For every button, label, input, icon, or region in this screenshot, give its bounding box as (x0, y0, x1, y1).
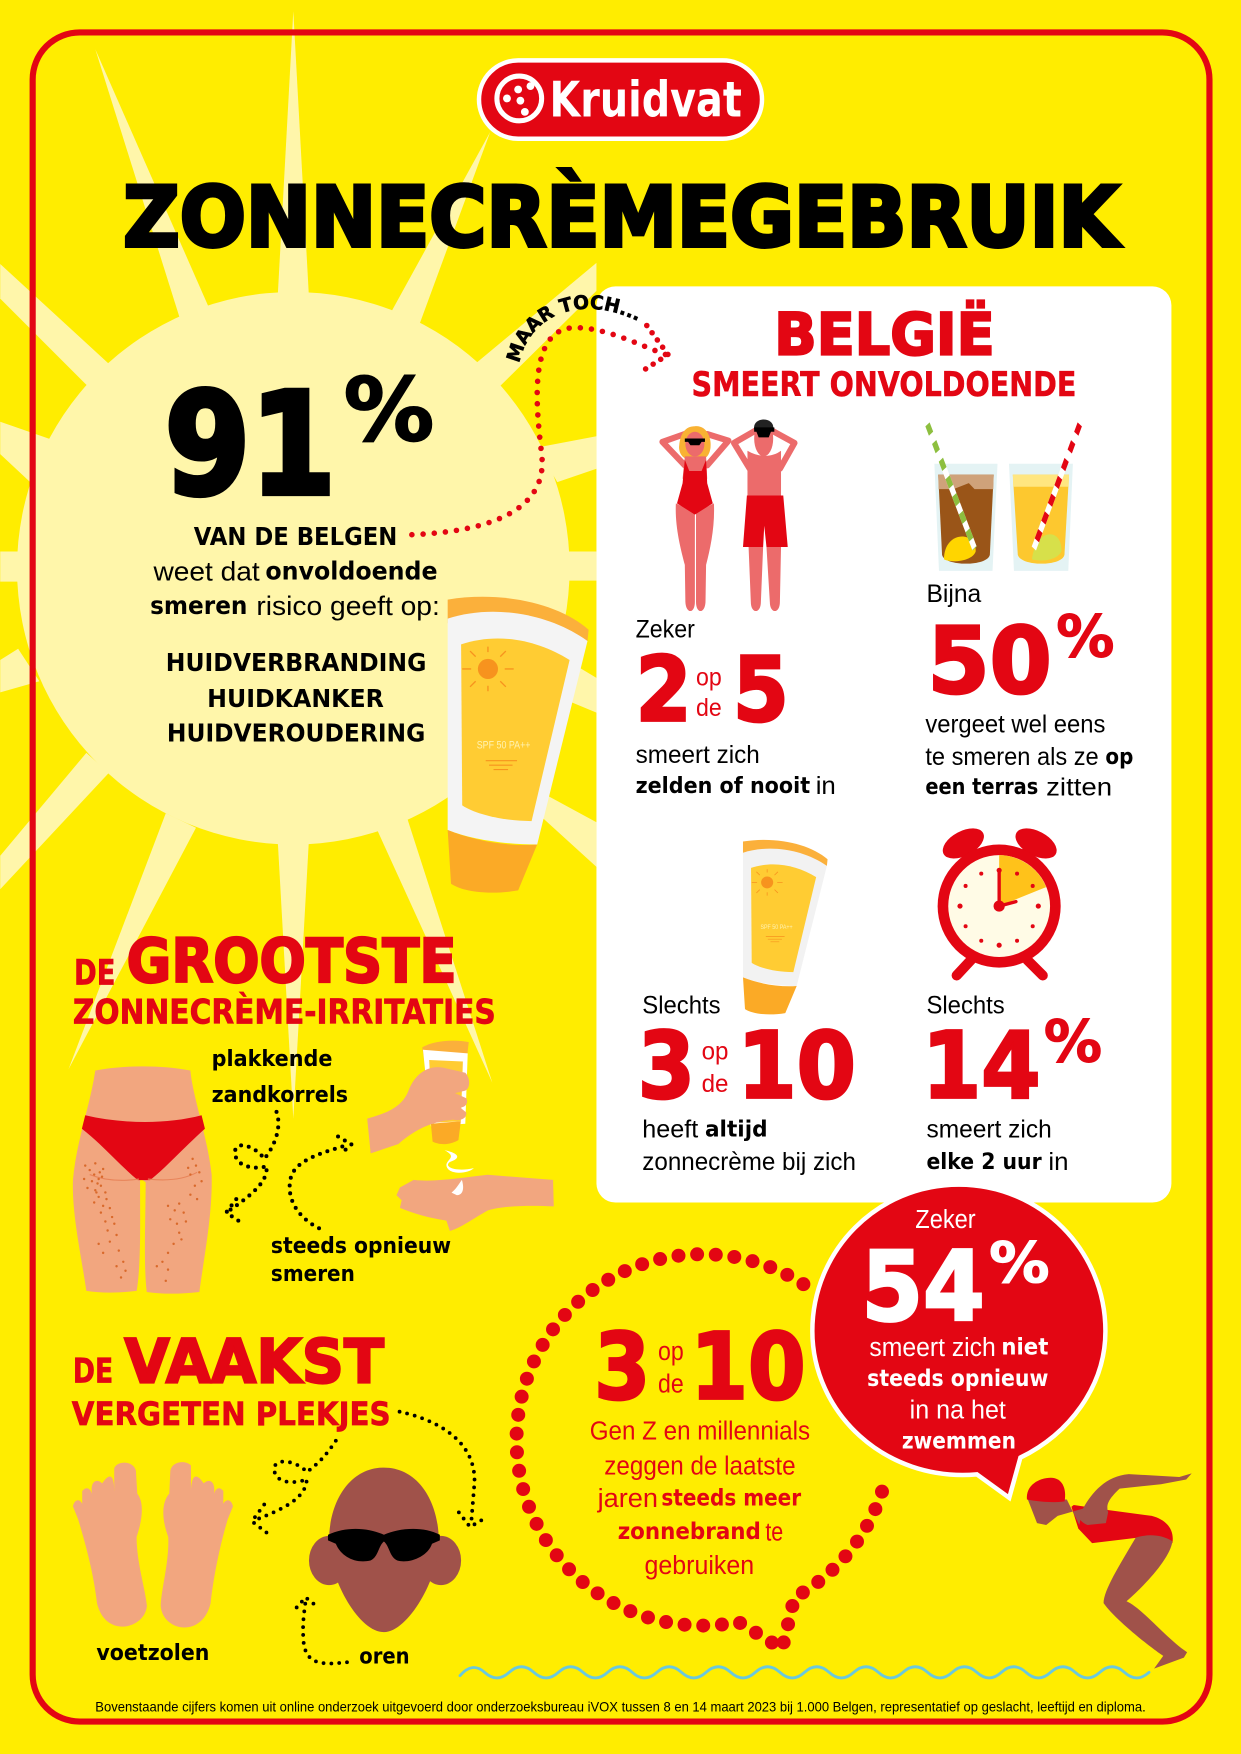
stat: 3 op de 10 altijd: de (702, 1071, 728, 1098)
stat: bijna 50 percent: Bijna (926, 581, 982, 608)
stat: 3 op de 10 Gen Z: de (658, 1371, 684, 1399)
headline stat: 91 percent: 91 (165, 363, 336, 527)
heading: de vaakst vergeten plekjes: DE (73, 1352, 113, 1391)
stat: 3 op de 10 altijd: heeft (642, 1117, 698, 1144)
stat: bijna 50 percent: op (1105, 744, 1133, 770)
stat: 2 op de 5: Zeker (636, 617, 695, 644)
stat: 3 op de 10 altijd (638, 992, 856, 1176)
stat: 2 op de 5: op (696, 665, 722, 692)
stat: 3 op de 10 Gen Z: jaren (597, 1485, 658, 1513)
stat: 3 op de 10 Gen Z: 10 (690, 1313, 806, 1420)
arrow: red dotted path (412, 326, 668, 535)
text block: van de Belgen: onvoldoende (265, 556, 438, 585)
arrow label: maar toch: MAAR TOCH... (506, 294, 638, 362)
label: steeds opnieuw smeren: steeds opnieuw (271, 1233, 451, 1259)
arrow: dotted to hands (290, 1137, 351, 1228)
stat: bijna 50 percent: vergeet wel eens (925, 712, 1105, 739)
callout: red speech bubble 54 percent: smeert zich (869, 1334, 996, 1362)
stat: 2 op de 5: zelden of nooit (636, 773, 810, 799)
stat: slechts 14 percent: % (1044, 1008, 1102, 1076)
stat: 2 op de 5: 5 (733, 638, 789, 742)
heading: de grootste irritaties: ZONNECRÈME-IRRITATIES (73, 992, 496, 1032)
heading: de vaakst vergeten plekjes (72, 1328, 391, 1433)
text block: van de Belgen: risico geeft op: (256, 591, 440, 621)
heading: de vaakst vergeten plekjes: VERGETEN PLEKJES (72, 1395, 391, 1433)
icon: diving swimmer (1027, 1473, 1192, 1669)
stat: 2 op de 5: de (696, 695, 722, 722)
heading: de grootste irritaties (73, 927, 496, 1032)
stat: slechts 14 percent: in (1048, 1149, 1069, 1176)
text block: risks: HUIDVERBRANDING (166, 648, 426, 677)
callout: red speech bubble 54 percent: % (989, 1231, 1049, 1296)
stat: bijna 50 percent: 50 (928, 607, 1052, 714)
label: steeds opnieuw smeren (271, 1233, 451, 1287)
logo: Kruidvat: Kruidvat (549, 70, 742, 128)
title: ZONNECRÈMEGEBRUIK (123, 169, 1122, 266)
heading: de grootste irritaties: DE (74, 953, 115, 993)
stat: 3 op de 10 altijd: Slechts (642, 992, 721, 1019)
icon: small sunscreen tube (743, 840, 828, 1014)
sun background with rays (0, 11, 596, 1119)
stat: 2 op de 5: in (816, 773, 836, 800)
stat: 3 op de 10 altijd: altijd (705, 1117, 768, 1143)
text block: risks: HUIDVEROUDERING (167, 719, 425, 748)
stat: 3 op de 10 Gen Z: gebruiken (645, 1552, 754, 1580)
icon: irritated thighs (73, 1066, 212, 1294)
stat: slechts 14 percent: Slechts (926, 992, 1005, 1019)
icon: alarm clock (938, 822, 1062, 975)
stat: 3 op de 10 altijd: 10 (737, 1012, 856, 1119)
stat: 3 op de 10 Gen Z (590, 1313, 810, 1580)
callout: red speech bubble 54 percent: 54 (862, 1231, 985, 1343)
stat: 3 op de 10 Gen Z: zonnebrand (618, 1517, 761, 1545)
stat: 3 op de 10 Gen Z: te (765, 1518, 783, 1546)
callout: red speech bubble 54 percent: Zeker (915, 1206, 976, 1234)
stat: slechts 14 percent (922, 992, 1102, 1176)
footnote: Bovenstaande cijfers komen uit online onderzoek uitgevoerd door onderzoeksbureau iVOX tussen 8 en 14 maart 2023 bij 1.000 Belgen, representatief op geslacht, leeftijd en diploma. (95, 1699, 1146, 1714)
label: plakkende zandkorrels (212, 1046, 348, 1108)
speech bubble outline: dotted circle (517, 1254, 886, 1649)
wave line (460, 1667, 1149, 1678)
panel: Belgie white card (596, 286, 1171, 1203)
stat: 2 op de 5: smeert zich (636, 742, 760, 769)
stat: 3 op de 10 altijd: op (702, 1038, 728, 1065)
callout: red speech bubble 54 percent: zwemmen (902, 1427, 1016, 1455)
stat: bijna 50 percent: zitten (1046, 774, 1112, 801)
icon: large sunscreen tube (448, 597, 589, 893)
stat: 3 op de 10 altijd: 3 (638, 1012, 695, 1119)
text block: van de Belgen: VAN DE BELGEN (194, 522, 397, 551)
heading: Belgie (692, 300, 1076, 404)
stat: bijna 50 percent: een terras (925, 774, 1038, 800)
icon: two drinks (927, 424, 1080, 571)
icon: small sunscreen tube: SPF 50 PA++ (760, 924, 793, 931)
logo: Kruidvat (479, 60, 762, 139)
icon: sunbathing couple (662, 419, 794, 611)
stat: bijna 50 percent (925, 581, 1133, 801)
stat: 3 op de 10 Gen Z: op (658, 1338, 684, 1366)
icon: feet soles (73, 1462, 233, 1628)
heading: de grootste irritaties: GROOTSTE (127, 927, 457, 997)
label: plakkende zandkorrels: plakkende (212, 1046, 332, 1072)
arrow: dotted loop to thighs (226, 1112, 278, 1222)
text block: risks (166, 648, 426, 748)
heading: de vaakst vergeten plekjes: VAAKST (124, 1328, 384, 1398)
callout: red speech bubble 54 percent: in na het (910, 1396, 1006, 1424)
text block: van de Belgen (150, 522, 440, 621)
stat: 2 op de 5: 2 (636, 638, 692, 742)
label: oren: oren (359, 1643, 410, 1669)
icon: hands with sunscreen (367, 1041, 554, 1231)
headline stat: 91 percent: % (344, 360, 434, 462)
text block: van de Belgen: smeren (150, 591, 247, 620)
stat: 3 op de 10 Gen Z: Gen Z en millennials (590, 1418, 810, 1446)
stat: 3 op de 10 Gen Z: steeds meer (661, 1484, 802, 1512)
stat: 3 op de 10 Gen Z: zeggen de laatste (604, 1452, 796, 1480)
icon: large sunscreen tube: SPF 50 PA++ (477, 739, 530, 751)
stat: 2 op de 5 (636, 617, 836, 800)
heading: Belgie: BELGIË (774, 300, 995, 369)
stat: slechts 14 percent: elke 2 uur (926, 1149, 1042, 1175)
icon: head with sunglasses (309, 1468, 461, 1632)
stat: 3 op de 10 Gen Z: 3 (594, 1313, 650, 1420)
stat: bijna 50 percent: te smeren als ze (925, 744, 1099, 771)
arrow: dotted from oren label (297, 1597, 347, 1663)
label: steeds opnieuw smeren: smeren (271, 1261, 355, 1287)
text block: van de Belgen: weet dat (152, 557, 260, 587)
stat: slechts 14 percent: 14 (922, 1012, 1041, 1119)
heading: Belgie: SMEERT ONVOLDOENDE (692, 365, 1076, 404)
stat: slechts 14 percent: smeert zich (926, 1117, 1052, 1144)
text block: risks: HUIDKANKER (207, 684, 384, 713)
label: voetzolen: voetzolen (96, 1640, 209, 1666)
stat: 3 op de 10 altijd: zonnecrème bij zich (642, 1149, 856, 1176)
label: plakkende zandkorrels: zandkorrels (212, 1082, 348, 1108)
callout: red speech bubble 54 percent (812, 1185, 1105, 1498)
arrow: dotted from heading to ear (400, 1412, 483, 1527)
callout: red speech bubble 54 percent: niet (1001, 1333, 1048, 1361)
arrow: dotted loop to feet (252, 1441, 336, 1533)
stat: bijna 50 percent: % (1056, 603, 1114, 671)
callout: red speech bubble 54 percent: steeds opnieuw (867, 1364, 1048, 1392)
